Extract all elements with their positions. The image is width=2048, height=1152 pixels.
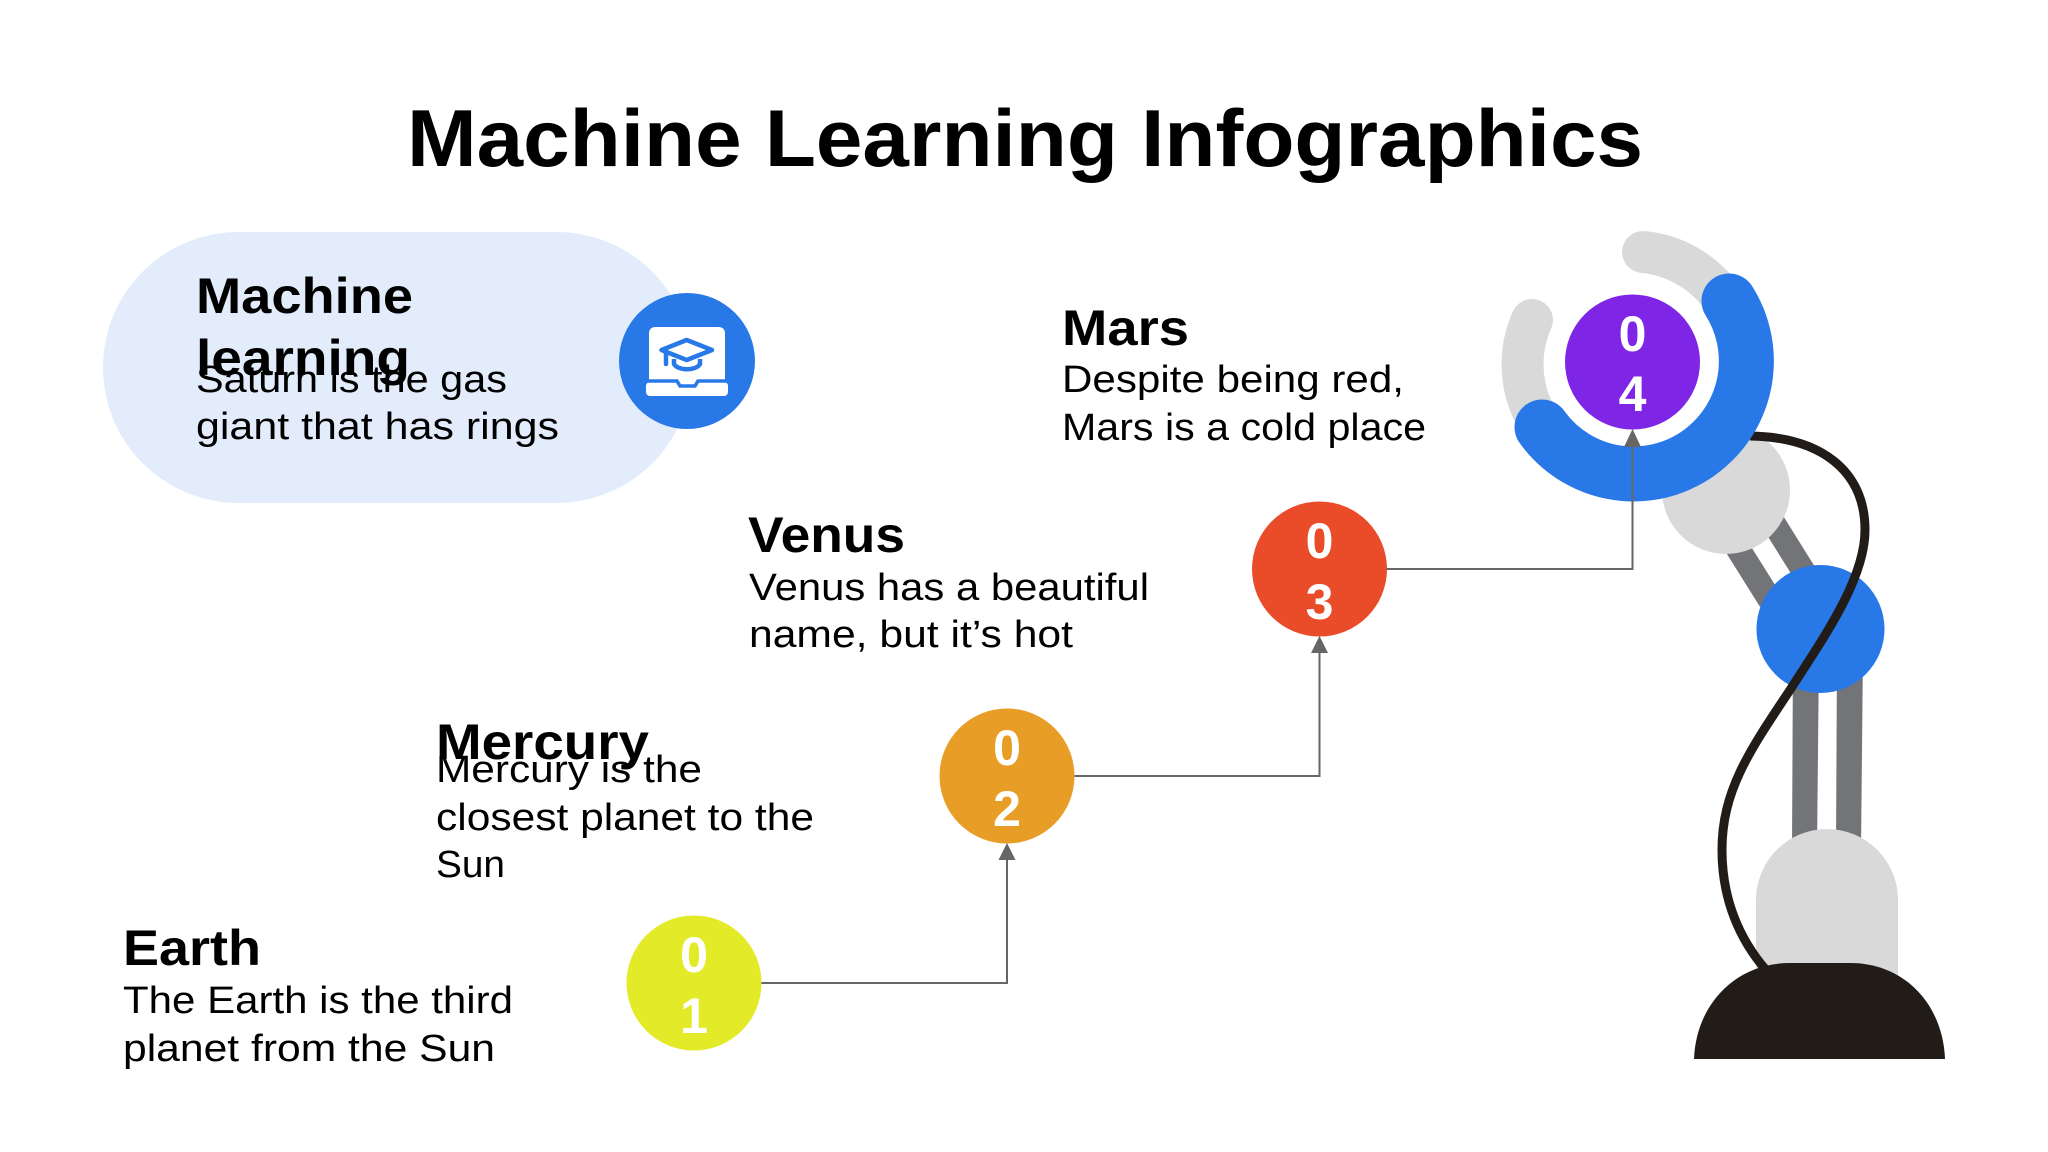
heading: machine learning: [196, 268, 413, 386]
gripper gray arcs: [1523, 252, 1727, 415]
pill background: [103, 232, 692, 503]
connector 01 to 02: [761, 843, 1016, 983]
text: venus: [749, 567, 1149, 656]
lower struts: [1792, 650, 1863, 850]
heading: machine learning: Machine: [196, 268, 413, 324]
text: earth: The Earth is the third: [123, 980, 513, 1022]
text: venus: Venus has a beautiful: [749, 567, 1149, 609]
base: [1694, 963, 1945, 1059]
upper struts: [1715, 498, 1825, 618]
badge 01: 0: [680, 927, 708, 983]
text: mars: Mars is a cold place: [1062, 407, 1426, 449]
badge 02: 0: [993, 720, 1021, 776]
title: Machine Learning Infographics: [407, 94, 1643, 184]
heading: venus: Venus: [748, 507, 905, 563]
text: earth: [123, 980, 513, 1070]
text: mercury: [436, 749, 814, 886]
badge 03: [1252, 502, 1387, 636]
gripper blue arc: [1542, 301, 1746, 474]
base column: [1756, 829, 1898, 1000]
badge 02: 2: [993, 781, 1021, 837]
badge 01: [626, 916, 762, 1050]
text: mars: [1062, 359, 1426, 449]
step 04: [1062, 294, 1700, 449]
badge 04: 4: [1619, 366, 1647, 422]
panel: machine learning: [103, 232, 755, 503]
heading: machine learning: learning: [196, 330, 410, 386]
text: saturn: [196, 359, 559, 448]
badge 04: [1565, 294, 1700, 430]
badge 03: 3: [1306, 574, 1333, 630]
badge 02: [940, 708, 1074, 844]
badge 01: 1: [680, 988, 708, 1044]
text: mercury: closest planet to the: [436, 797, 814, 839]
cable: [1722, 436, 1865, 970]
robot arm illustration: [1523, 252, 1945, 1059]
text: mars: Despite being red,: [1062, 359, 1404, 401]
text: venus: name, but it’s hot: [749, 614, 1073, 656]
connector 03 to 04: [1386, 429, 1641, 569]
text: mercury: Mercury is the: [436, 749, 702, 791]
text: earth: planet from the Sun: [123, 1028, 495, 1070]
heading: mercury: Mercury: [436, 714, 649, 770]
wrist joint: [1756, 565, 1884, 693]
elbow joint: [1662, 426, 1790, 554]
step 01: [123, 916, 762, 1070]
badge 04: 0: [1619, 306, 1646, 362]
step 03: [748, 502, 1387, 656]
step 02: [436, 708, 1074, 886]
icon: laptop with graduation cap: [619, 293, 755, 429]
heading: earth: Earth: [123, 920, 261, 976]
heading: mars: Mars: [1062, 300, 1189, 356]
badge 03: 0: [1306, 513, 1333, 569]
connector 02 to 03: [1074, 636, 1328, 776]
text: saturn: giant that has rings: [196, 406, 559, 448]
text: mercury: Sun: [436, 844, 505, 886]
text: saturn: Saturn is the gas: [196, 359, 507, 401]
